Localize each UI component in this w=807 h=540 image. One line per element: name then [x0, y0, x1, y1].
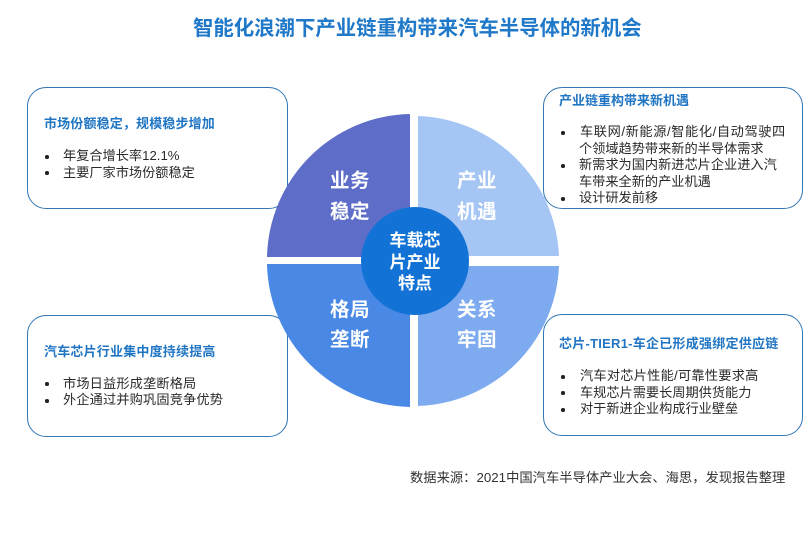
bullets: binding supply chain: 汽车对芯片性能/可靠性要求高 [580, 368, 759, 383]
quadrant: industry opportunity [418, 116, 559, 256]
quadrant: monopoly pattern: 格局 [330, 299, 370, 321]
bullets: market share [45, 148, 195, 180]
panel: concentration [27, 315, 288, 437]
bullets: supply chain opportunity: 设计研发前移 [579, 190, 658, 205]
center circle: 片产业 [390, 253, 440, 272]
center circle: 特点 [398, 274, 432, 293]
panel: binding supply chain [543, 314, 803, 436]
bullets: supply chain opportunity: 个领域趋势带来新的半导体需求 [579, 140, 764, 156]
heading: concentration: 汽车芯片行业集中度持续提高 [44, 344, 216, 359]
bullets: supply chain opportunity: 车带来全新的产业机遇 [579, 174, 711, 188]
quadrant: monopoly pattern: 垄断 [330, 329, 370, 351]
quadrant: monopoly pattern [267, 264, 410, 407]
bullets: supply chain opportunity: 新需求为国内新进芯片企业进入汽 [579, 157, 777, 172]
quadrant: business stability: 业务 [330, 170, 370, 192]
bullets: market share: 年复合增长率12.1% [63, 148, 180, 163]
panel: market share [27, 87, 288, 209]
bullets: concentration: 市场日益形成垄断格局 [63, 376, 196, 390]
title: 智能化浪潮下产业链重构带来汽车半导体的新机会 [193, 18, 642, 40]
panel: supply chain opportunity [543, 87, 803, 209]
source note: 数据来源：2021中国汽车半导体产业大会、海思，发现报告整理 [410, 470, 785, 485]
bullets: binding supply chain: 车规芯片需要长周期供货能力 [580, 384, 751, 400]
heading: market share: 市场份额稳定，规模稳步增加 [44, 116, 215, 131]
center circle: 车载芯 [390, 230, 440, 250]
quadrant: industry opportunity: 机遇 [457, 201, 497, 223]
quadrant: industry opportunity: 产业 [457, 170, 497, 192]
bullets: concentration [45, 376, 223, 407]
bullets: binding supply chain [561, 368, 759, 416]
bullets: supply chain opportunity: 车联网/新能源/智能化/自动驾驶四 [580, 124, 786, 139]
heading: binding supply chain: 芯片-TIER1-车企已形成强绑定供应链 [559, 336, 779, 351]
quadrant: business stability [267, 114, 410, 257]
bullets: market share: 主要厂家市场份额稳定 [63, 164, 195, 180]
bullets: concentration: 外企通过并购巩固竞争优势 [63, 392, 223, 407]
quadrant: solid relationships [418, 266, 559, 406]
quadrant: solid relationships: 关系 [457, 299, 497, 321]
bullets: supply chain opportunity [561, 124, 786, 205]
heading: supply chain opportunity: 产业链重构带来新机遇 [559, 93, 689, 108]
bullets: binding supply chain: 对于新进企业构成行业壁垒 [580, 400, 738, 416]
center circle [361, 207, 469, 315]
quadrant: business stability: 稳定 [330, 200, 370, 223]
quadrant: solid relationships: 牢固 [457, 329, 497, 351]
